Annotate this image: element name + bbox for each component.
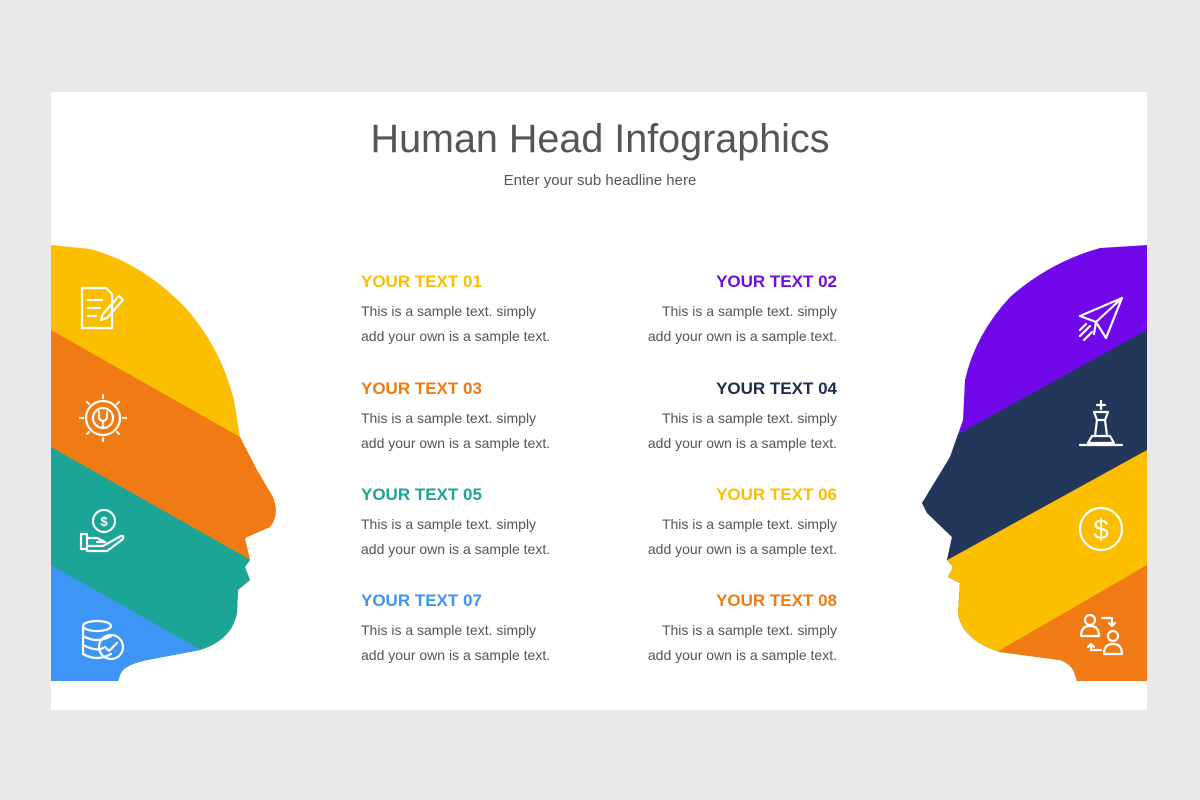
right head <box>922 245 1147 681</box>
item 08: add your own is a sample text. <box>648 647 837 663</box>
icon: gear wrench <box>80 395 126 441</box>
item 04: add your own is a sample text. <box>648 435 837 451</box>
item 03: This is a sample text. simply <box>361 410 536 426</box>
item 03: YOUR TEXT 03 <box>361 379 482 398</box>
item 08: This is a sample text. simply <box>662 622 837 638</box>
item 08: YOUR TEXT 08 <box>716 591 837 610</box>
icon: document pen <box>82 288 123 328</box>
item 05 <box>361 485 550 557</box>
item 03: add your own is a sample text. <box>361 435 550 451</box>
title: Human Head Infographics <box>371 117 829 161</box>
item 07: add your own is a sample text. <box>361 647 550 663</box>
item 06: add your own is a sample text. <box>648 541 837 557</box>
icon: paper plane <box>1080 298 1122 340</box>
icon: people exchange <box>1081 615 1122 654</box>
item 04 <box>648 379 837 451</box>
item 05: YOUR TEXT 05 <box>361 485 482 504</box>
item 06: This is a sample text. simply <box>662 516 837 532</box>
item 01: YOUR TEXT 01 <box>361 272 482 291</box>
item 02: add your own is a sample text. <box>648 328 837 344</box>
item 06 <box>648 485 837 557</box>
icon: dollar coin: $ <box>1093 514 1109 545</box>
item 04: This is a sample text. simply <box>662 410 837 426</box>
item 05: add your own is a sample text. <box>361 541 550 557</box>
item 02: This is a sample text. simply <box>662 303 837 319</box>
icon: hand coin: $ <box>100 514 108 529</box>
item 08 <box>648 591 837 663</box>
subtitle: Enter your sub headline here <box>504 172 696 189</box>
item 02: YOUR TEXT 02 <box>716 272 837 291</box>
item 07: YOUR TEXT 07 <box>361 591 482 610</box>
icon: dollar coin <box>1080 508 1122 550</box>
item 05: This is a sample text. simply <box>361 516 536 532</box>
item 07 <box>361 591 550 663</box>
item 07: This is a sample text. simply <box>361 622 536 638</box>
item 01 <box>361 272 550 344</box>
item 01: This is a sample text. simply <box>361 303 536 319</box>
left head <box>51 245 276 681</box>
icon: chess king <box>1080 401 1122 445</box>
icon: database check <box>83 621 123 659</box>
icon: hand coin <box>81 510 123 551</box>
item 04: YOUR TEXT 04 <box>716 379 837 398</box>
item 01: add your own is a sample text. <box>361 328 550 344</box>
item 06: YOUR TEXT 06 <box>716 485 837 504</box>
slide card <box>51 92 1147 710</box>
item 02 <box>648 272 837 344</box>
item 03 <box>361 379 550 451</box>
